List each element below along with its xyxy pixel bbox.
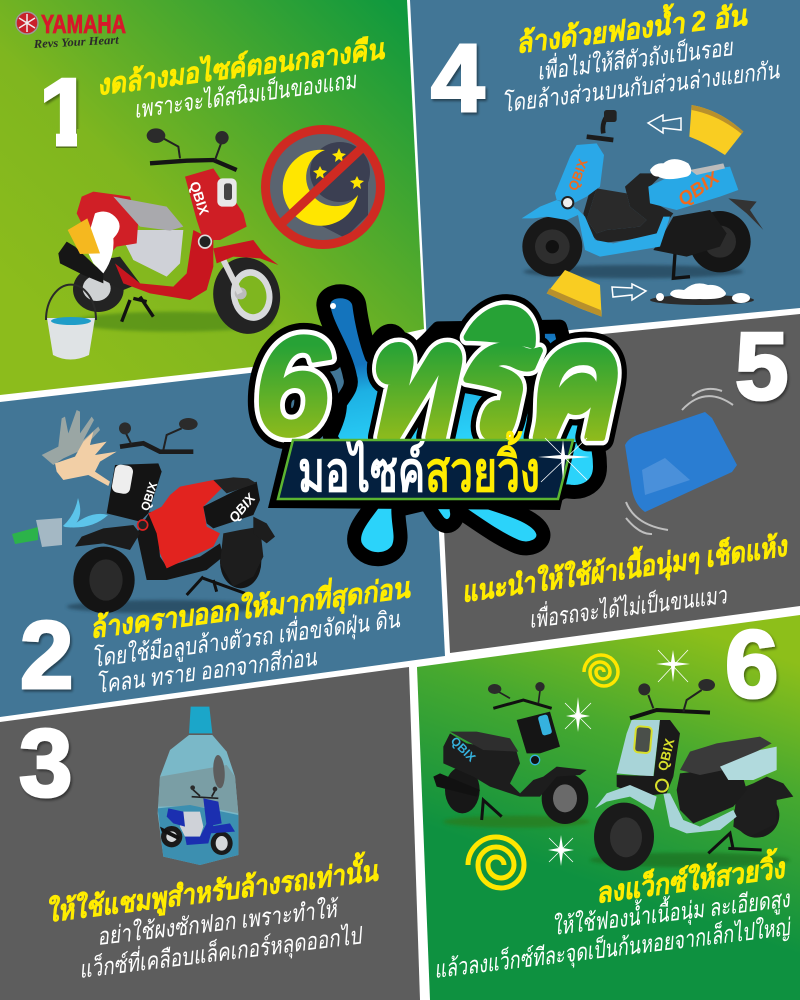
number 6: 6 xyxy=(725,611,778,718)
title word: ทริค xyxy=(362,295,617,468)
title number 6: 6 xyxy=(254,307,331,466)
body 2 line 2: โคลน ทราย ออกจากสีก่อน xyxy=(94,643,318,699)
red scooter xyxy=(58,128,286,339)
body 1: เพราะจะได้สนิมเป็นของแถม xyxy=(132,65,359,124)
arrow left xyxy=(648,115,681,133)
number 3: 3 xyxy=(19,710,72,817)
icon: no night sign xyxy=(266,130,380,244)
heading 3: ให้ใช้แชมพูสำหรับล้างรถเท่านั้น xyxy=(43,849,381,930)
red scooter: QBIX xyxy=(186,179,212,217)
heading 2: ล้างคราบออกให้มากที่สุดก่อน xyxy=(87,567,413,646)
icon: water nozzle xyxy=(12,498,108,547)
icon: small spiral xyxy=(584,655,618,686)
pale blue scooter xyxy=(590,679,793,871)
sparkle xyxy=(538,438,590,482)
body 2 line 1: โดยใช้มือลูบล้างตัวรถ เพื่อขจัดฝุ่น ดิน xyxy=(90,602,402,674)
Yamaha logo: Revs Your Heart xyxy=(32,33,120,51)
black and red scooter: QBIX xyxy=(138,480,160,513)
panel 3 background xyxy=(0,667,420,1000)
heading 1: งดล้างมอไซค์ตอนกลางคืน xyxy=(95,32,387,101)
body 4 line 1: เพื่อไม่ให้สีตัวถังเป็นรอย xyxy=(535,30,736,86)
icon: large spiral xyxy=(468,837,524,888)
panel 5: soft towel xyxy=(435,313,800,653)
black and red scooter xyxy=(67,418,275,613)
bucket xyxy=(46,285,96,360)
blue scooter: QBIX xyxy=(674,166,724,210)
central title badge xyxy=(254,291,617,559)
panel 3: shampoo xyxy=(0,667,420,1000)
panel 1 background xyxy=(0,0,424,395)
icon: blue towel xyxy=(625,412,737,512)
black and red scooter: QBIX xyxy=(226,490,259,525)
sponge top xyxy=(689,105,743,155)
panel 4 background xyxy=(410,0,800,345)
panel 6: wax xyxy=(417,611,800,1000)
number 1: 1 xyxy=(39,59,92,166)
number 2: 2 xyxy=(20,602,73,709)
pale blue scooter: QBIX xyxy=(655,737,677,772)
panel 2: wash off the dirt xyxy=(0,352,445,717)
Yamaha logo xyxy=(16,9,126,51)
body 3 line 1: อย่าใช้ผงซักฟอก เพราะทำให้ xyxy=(95,895,342,951)
body 5: เพื่อรถจะได้ไม่เป็นขนแมว xyxy=(527,578,729,634)
blue scooter xyxy=(522,110,763,278)
water splash xyxy=(323,291,600,559)
panel 1: no washing at night xyxy=(0,0,424,395)
panel 4: two sponges xyxy=(410,0,800,345)
panel 6 background xyxy=(417,615,800,1000)
motion lines xyxy=(626,389,733,534)
sponge bottom xyxy=(547,270,602,317)
body 3 line 2: แว็กซ์ที่เคลือบแล็คเกอร์หลุดออกไป xyxy=(77,918,366,985)
number 5: 5 xyxy=(735,313,788,420)
panel 2 background xyxy=(0,352,445,717)
blue scooter: QBIX xyxy=(565,157,591,193)
title word: ทริค xyxy=(362,295,617,468)
panel 5 background xyxy=(435,314,800,653)
black scooter: QBIX xyxy=(448,734,479,765)
Yamaha logo: YAMAHA xyxy=(41,9,126,39)
title number 6: 6 xyxy=(254,307,331,466)
arrow right xyxy=(612,284,646,300)
icon: hands xyxy=(42,410,117,486)
icon: shampoo bottle with scooter xyxy=(158,707,238,865)
title word: ทริค xyxy=(362,295,617,468)
splash highlight xyxy=(330,303,336,309)
title number 6: 6 xyxy=(254,307,331,466)
number 4: 4 xyxy=(431,25,484,132)
black scooter xyxy=(433,682,590,828)
sparkles xyxy=(548,650,690,866)
foam on ground xyxy=(650,283,754,305)
title banner: มอไซค์สวยวิ้ง xyxy=(298,431,540,503)
